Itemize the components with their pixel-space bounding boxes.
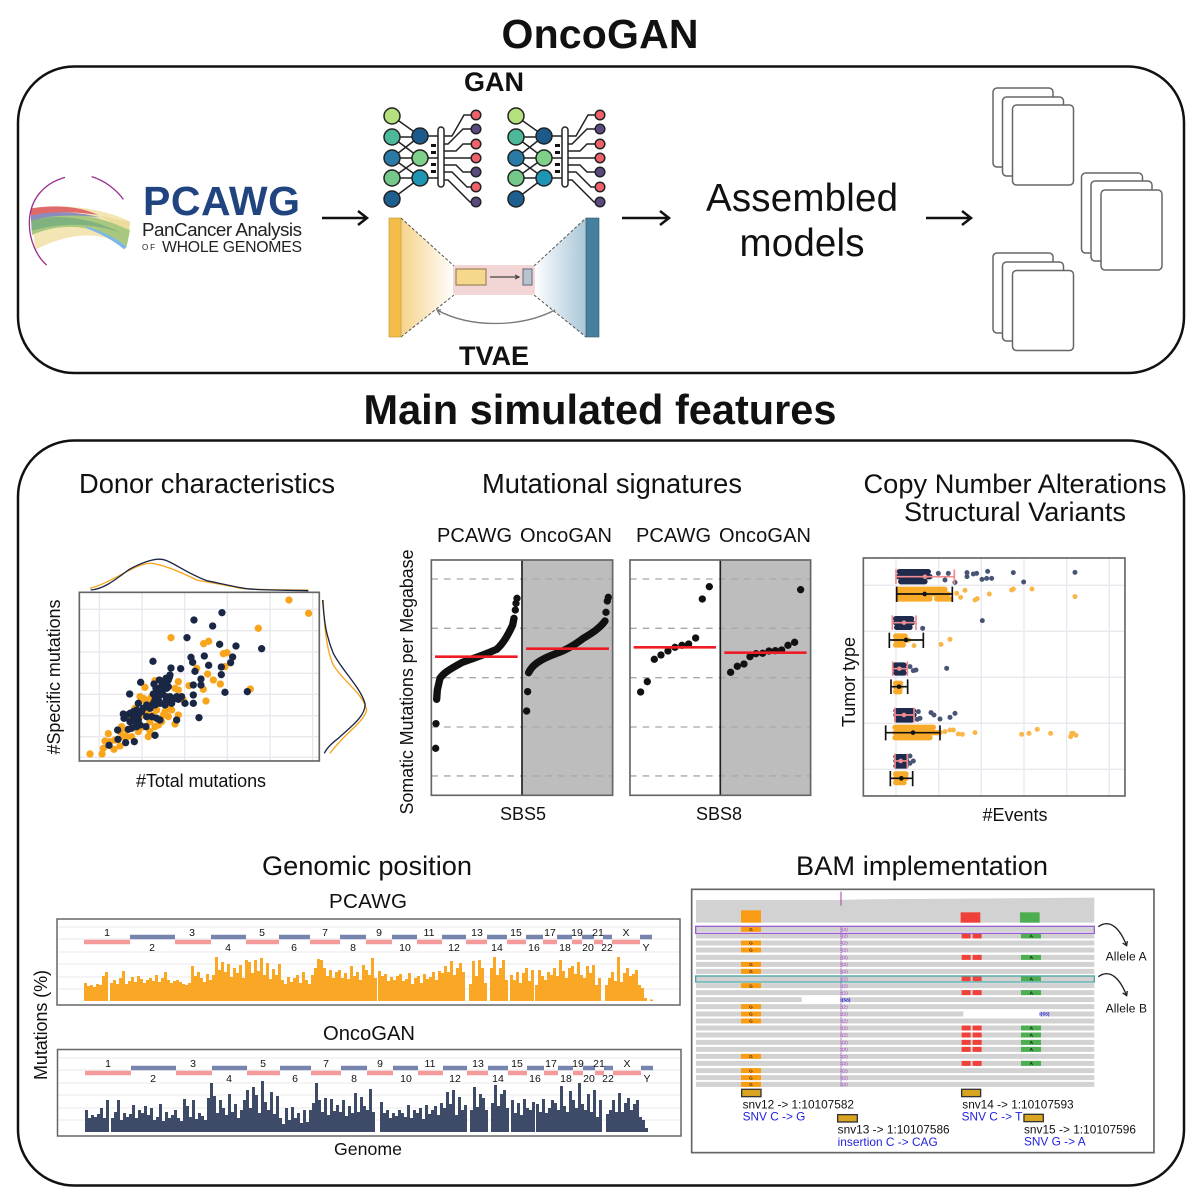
chromosome ideogram: PCAWG: 20 (582, 942, 594, 954)
logo: PCAWG: PanCancer Analysis (142, 219, 302, 240)
chromosome ideogram: OncoGAN: 13 (472, 1058, 484, 1070)
chromosome ideogram: PCAWG: 22 (601, 942, 613, 954)
chromosome ideogram: OncoGAN: 17 (545, 1058, 557, 1070)
read alignments: A (1030, 1033, 1034, 1038)
chromosome ideogram: PCAWG: 13 (471, 927, 483, 939)
chromosome ideogram: PCAWG: 16 (528, 942, 540, 954)
read alignments: G (749, 1082, 753, 1087)
chromosome ideogram: PCAWG: 5 (259, 927, 265, 939)
panel: features (18, 440, 1184, 1186)
chromosome ideogram: PCAWG: 14 (491, 942, 503, 954)
chromosome ideogram: OncoGAN: Y (643, 1073, 651, 1085)
read alignments: I(2) (840, 969, 848, 975)
chromosome ideogram: PCAWG: X (622, 927, 630, 939)
chromosome ideogram: OncoGAN: 12 (449, 1073, 461, 1085)
read alignments: I(2) (840, 1082, 848, 1088)
annotation text: snv15 -> 1:10107596 (1024, 1122, 1136, 1136)
chromosome ideogram: PCAWG: 9 (376, 927, 382, 939)
chromosome ideogram: OncoGAN: 21 (593, 1058, 605, 1070)
read alignments: A (1030, 1040, 1034, 1045)
chromosome ideogram: PCAWG: 18 (559, 942, 571, 954)
chromosome ideogram: OncoGAN (85, 1058, 653, 1085)
read alignments: G (749, 927, 753, 932)
read alignments: I(2) (840, 990, 848, 996)
scatter chart: donor characteristics (79, 559, 367, 761)
read alignments: A (1030, 955, 1034, 960)
icon: rainbow arc (29, 177, 130, 265)
chromosome ideogram: OncoGAN: 18 (560, 1073, 572, 1085)
read alignments: I(55) (1039, 1012, 1050, 1018)
annotation text: snv13 -> 1:10107586 (838, 1122, 950, 1136)
axis label: tumor type: Tumor type (839, 637, 859, 727)
labels: alleles: Allele B (1106, 1001, 1147, 1015)
read alignments: I(2) (840, 962, 848, 968)
heading: CNA and structural variants (864, 468, 1166, 527)
heading: TVAE: TVAE (459, 341, 529, 371)
subheading: PCAWG genome: PCAWG (329, 890, 407, 913)
chromosome ideogram: PCAWG: 12 (448, 942, 460, 954)
chromosome ideogram: OncoGAN: 14 (492, 1073, 504, 1085)
annotation text: snv12 -> 1:10107582 (743, 1097, 854, 1111)
chromosome ideogram: OncoGAN: 3 (190, 1058, 196, 1070)
axis label: events: #Events (982, 805, 1048, 825)
chromosome ideogram: PCAWG: Y (642, 942, 650, 954)
read alignments: I(2) (840, 976, 848, 982)
axis label: total mutations: #Total mutations (136, 771, 266, 791)
heading: GAN: GAN (464, 67, 524, 97)
chromosome ideogram: PCAWG: 10 (399, 942, 411, 954)
chromosome ideogram: PCAWG: 8 (350, 942, 356, 954)
chromosome ideogram: PCAWG: 4 (225, 942, 231, 954)
title: OncoGAN (502, 11, 698, 57)
annotation tracks (742, 1089, 1043, 1122)
read alignments: A (1030, 1026, 1034, 1031)
icon: GAN network 1 (384, 108, 481, 207)
read alignments: A (1030, 1047, 1034, 1052)
heading: BAM implementation: BAM implementation (796, 850, 1048, 881)
labels: alleles: Allele A (1106, 950, 1147, 964)
chromosome ideogram: OncoGAN: 2 (150, 1073, 156, 1085)
chromosome ideogram: OncoGAN: 8 (351, 1073, 357, 1085)
icon: stacked document groups (993, 88, 1162, 350)
labels: alleles (1106, 950, 1147, 1015)
text: assembled models: Assembled (706, 177, 898, 220)
logo: PCAWG: OF (142, 243, 155, 252)
axis labels: SBS5 and SBS8 (500, 804, 742, 824)
chromosome ideogram: OncoGAN: 1 (105, 1058, 111, 1070)
chromosome ideogram: OncoGAN: 9 (377, 1058, 383, 1070)
read alignments: I(2) (840, 934, 848, 940)
read alignments: A (1030, 934, 1034, 939)
chromosome ideogram: OncoGAN: 11 (425, 1058, 436, 1070)
read alignments: I(2) (840, 955, 848, 961)
arrow: PCAWG to models (322, 211, 367, 225)
logo: PCAWG (29, 177, 302, 265)
read alignments: G (749, 1004, 753, 1009)
chart: events by tumor type (863, 558, 1125, 796)
chart: PCAWG genome profile (57, 919, 680, 1005)
read alignments: I(2) (840, 1075, 848, 1081)
heading: CNA and structural variants: Structural Variants (904, 496, 1126, 527)
read alignments: A (1030, 976, 1034, 981)
figure: BAM viewer (692, 889, 1154, 1153)
read alignments: I(2) (840, 1004, 848, 1010)
read alignments: I(58) (840, 997, 851, 1003)
read alignments: A (1030, 1061, 1034, 1066)
chromosome ideogram: OncoGAN: 10 (400, 1073, 412, 1085)
chromosome ideogram: OncoGAN: 22 (602, 1073, 614, 1085)
read alignments: I(2) (840, 1047, 848, 1053)
read alignments: G (749, 1075, 753, 1080)
text: assembled models: models (740, 222, 864, 265)
column labels: signatures: PCAWG (437, 525, 512, 547)
column labels: signatures (437, 525, 811, 547)
read alignments: I(2) (840, 983, 848, 989)
chromosome ideogram: PCAWG (84, 927, 652, 954)
arrow: assembled to outputs (926, 211, 971, 225)
logo: PCAWG: WHOLE GENOMES (162, 239, 302, 256)
read alignments: G (749, 1019, 753, 1024)
icon: GAN network 2 (508, 108, 605, 207)
read alignments (696, 926, 1094, 1088)
chromosome ideogram: OncoGAN: 6 (292, 1073, 298, 1085)
chromosome ideogram: PCAWG: 17 (544, 927, 556, 939)
annotation text: SNV C -> T (962, 1109, 1022, 1123)
read alignments: G (749, 962, 753, 967)
text: assembled models (706, 177, 898, 265)
annotation text: insertion C -> CAG (838, 1135, 938, 1149)
column labels: signatures: PCAWG (636, 525, 711, 547)
chromosome ideogram: PCAWG: 1 (104, 927, 110, 939)
chromosome ideogram: PCAWG: 11 (424, 927, 435, 939)
axis label: mutations percent: Mutations (%) (31, 970, 51, 1080)
arrow: models to assembled (622, 211, 669, 225)
highlight: allele B read (696, 976, 1094, 982)
chromosome ideogram: OncoGAN: 16 (529, 1073, 541, 1085)
heading: main simulated features: Main simulated features (364, 386, 836, 433)
annotation text: SNV C -> G (743, 1109, 805, 1123)
chromosome ideogram: PCAWG: 21 (592, 927, 604, 939)
annotation text (743, 1097, 1136, 1149)
heading: CNA and structural variants: Copy Number Alterations (864, 468, 1166, 499)
read alignments: I(2) (840, 927, 848, 933)
column labels: signatures: OncoGAN (520, 525, 612, 547)
heading: genomic position: Genomic position (262, 850, 472, 881)
diagram: TVAE autoencoder (389, 218, 599, 337)
read alignments: A (1030, 990, 1034, 995)
chromosome ideogram: OncoGAN: 15 (511, 1058, 523, 1070)
chromosome ideogram: PCAWG: 15 (510, 927, 522, 939)
axis label: genome: Genome (334, 1139, 402, 1159)
chromosome ideogram: PCAWG: 6 (291, 942, 297, 954)
chromosome ideogram: OncoGAN: 4 (226, 1073, 232, 1085)
read alignments: I(2) (840, 1068, 848, 1074)
read alignments: I(2) (840, 1019, 848, 1025)
read alignments: G (749, 1012, 753, 1017)
chromosome ideogram: OncoGAN: 7 (323, 1058, 329, 1070)
chromosome ideogram: PCAWG: 19 (571, 927, 583, 939)
subheading: OncoGAN genome: OncoGAN (323, 1023, 415, 1045)
chromosome ideogram: OncoGAN: 5 (260, 1058, 266, 1070)
read alignments: G (749, 948, 753, 953)
read alignments: G (749, 941, 753, 946)
axis labels: SBS5 and SBS8: SBS8 (696, 804, 742, 824)
read alignments: I(2) (840, 1026, 848, 1032)
heading: mutational signatures: Mutational signatures (482, 468, 742, 499)
arrow: allele A (1098, 924, 1127, 946)
axis label: somatic mutations per megabase: Somatic Mutations per Megabase (397, 550, 417, 814)
chart: mutational signature rank plots (431, 560, 811, 795)
chromosome ideogram: OncoGAN: 20 (583, 1073, 595, 1085)
column labels: signatures: OncoGAN (719, 525, 811, 547)
read alignments: I(2) (840, 948, 848, 954)
axis labels: SBS5 and SBS8: SBS5 (500, 804, 546, 824)
chromosome ideogram: PCAWG: 3 (189, 927, 195, 939)
chart: OncoGAN genome profile (58, 1050, 681, 1136)
chromosome ideogram: PCAWG: 7 (322, 927, 328, 939)
read alignments: I(2) (840, 1061, 848, 1067)
read alignments: G (749, 1068, 753, 1073)
read alignments: I(2) (840, 1012, 848, 1018)
coverage track (696, 892, 1094, 923)
read alignments: I(2) (840, 1033, 848, 1039)
annotation text: snv14 -> 1:10107593 (962, 1097, 1074, 1111)
read alignments: G (749, 1054, 753, 1059)
heading: donor characteristics: Donor characteristics (79, 468, 335, 499)
read alignments: I(2) (840, 941, 848, 947)
chromosome ideogram: PCAWG: 2 (149, 942, 155, 954)
read alignments: G (749, 983, 753, 988)
panel: model pipeline (18, 66, 1184, 373)
read alignments: I(2) (840, 1054, 848, 1060)
read alignments: G (749, 969, 753, 974)
axis label: specific mutations: #Specific mutations (44, 600, 64, 754)
chromosome ideogram: OncoGAN: X (623, 1058, 631, 1070)
annotation text: SNV G -> A (1024, 1135, 1086, 1149)
logo: PCAWG: PCAWG (143, 178, 300, 224)
highlight: allele A read (696, 926, 1094, 933)
arrow: allele B (1098, 974, 1127, 996)
read alignments: I(2) (840, 1040, 848, 1046)
chromosome ideogram: OncoGAN: 19 (572, 1058, 584, 1070)
